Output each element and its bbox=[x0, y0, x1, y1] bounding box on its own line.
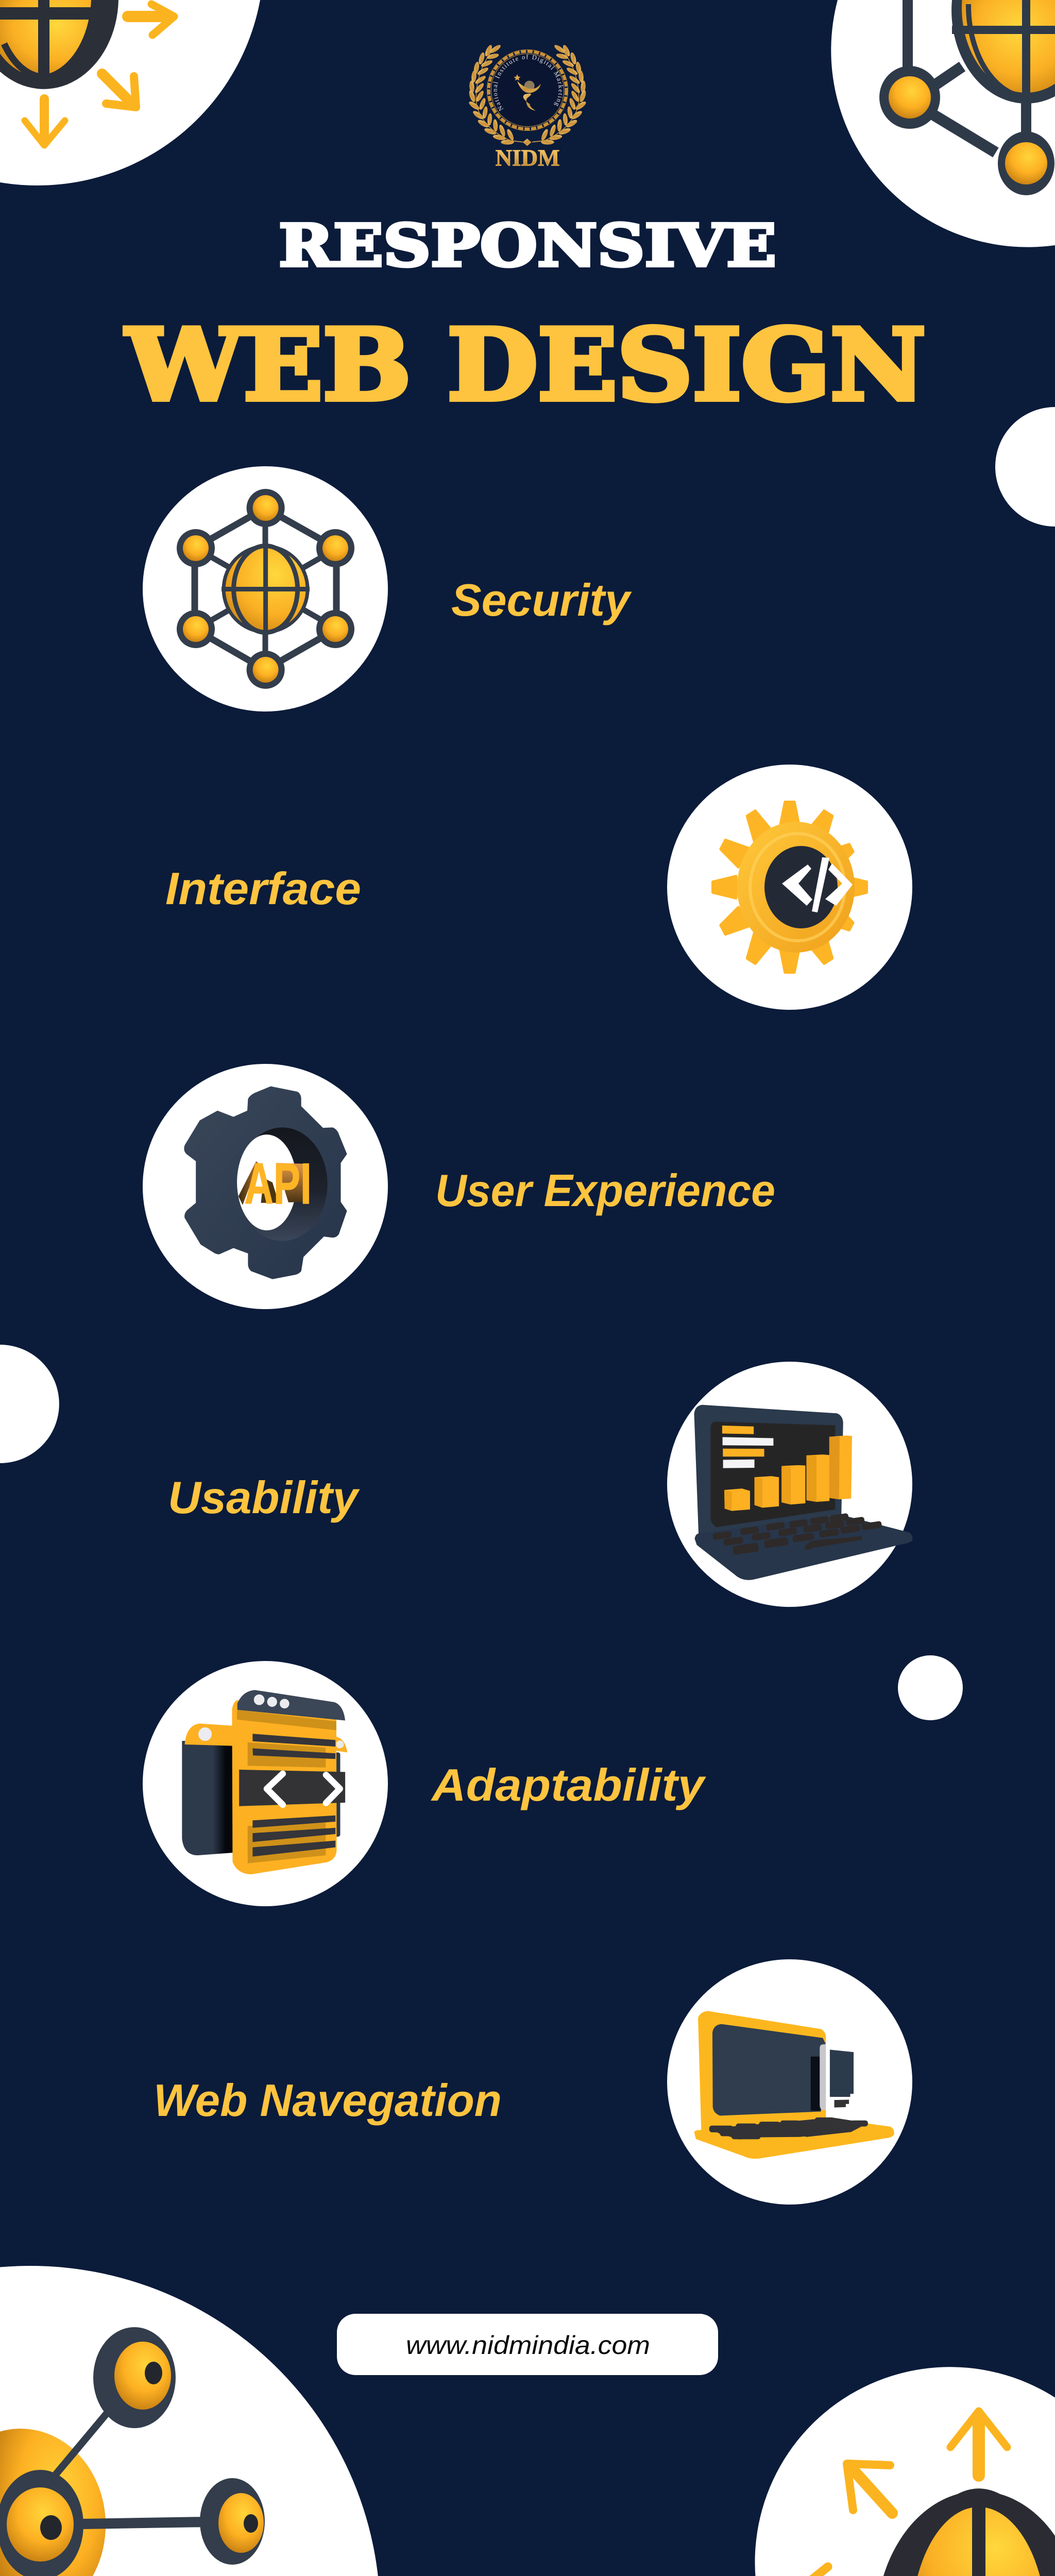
list bars bbox=[722, 1426, 773, 1468]
label: User Experience bbox=[435, 1165, 775, 1216]
decorative circle: top left with globe and arrows bbox=[0, 0, 260, 185]
title: RESPONSIVE: RESPONSIVE bbox=[279, 212, 776, 280]
icon: top node bbox=[93, 2327, 176, 2428]
decorative circle: left bbox=[0, 1345, 59, 1463]
icon disc bbox=[667, 1362, 912, 1607]
panel: adaptability bbox=[143, 1661, 706, 1906]
icon: main node bbox=[0, 2470, 83, 2576]
laptop lid bbox=[694, 1405, 843, 1534]
phone shadow bbox=[811, 2057, 821, 2111]
panel: web navigation bbox=[154, 1959, 912, 2205]
decorative circle: bottom right with globe and arrows bbox=[755, 2367, 1055, 2576]
front panel bbox=[232, 1700, 337, 1874]
icon: cropped globe bbox=[0, 0, 118, 89]
window header bbox=[237, 1690, 345, 1720]
label: Adaptability bbox=[431, 1759, 706, 1810]
keyboard bbox=[712, 1513, 882, 1555]
gear hole bbox=[237, 1134, 297, 1230]
gear body bbox=[184, 1087, 347, 1279]
icon disc bbox=[143, 466, 388, 711]
icon: network lines bbox=[903, 0, 1031, 152]
icon: right node bbox=[200, 2478, 265, 2565]
gear inner wall bbox=[237, 1127, 328, 1241]
icon: network node left bbox=[879, 66, 940, 129]
icon: down arrow bbox=[25, 99, 65, 145]
icon: diagonal arrow bbox=[847, 2464, 892, 2513]
laurel right bbox=[532, 44, 587, 145]
website pill bbox=[337, 2314, 718, 2375]
decorative circle: bottom left with network nodes bbox=[0, 2266, 380, 2576]
icon: cropped globe bbox=[875, 2488, 1055, 2576]
icon: yellow sphere bbox=[0, 2429, 106, 2576]
icon: cropped globe bbox=[951, 0, 1055, 104]
laptop base bbox=[694, 2118, 894, 2159]
gear hub bbox=[764, 846, 838, 928]
window buttons bbox=[254, 1694, 290, 1708]
gear ring bbox=[737, 822, 855, 953]
laptop base bbox=[695, 1515, 912, 1580]
logo: NIDM emblem bbox=[469, 45, 586, 171]
panel: user experience bbox=[143, 1064, 775, 1309]
logo wordmark: NIDM bbox=[496, 145, 560, 171]
label: Web Navegation bbox=[154, 2075, 502, 2126]
title: WEB DESIGN: WEB DESIGN bbox=[125, 308, 926, 422]
laptop screen bbox=[712, 2024, 825, 2115]
icon: code gear bbox=[713, 802, 866, 972]
icon: network node bottom bbox=[998, 131, 1054, 195]
network nodes bbox=[177, 489, 354, 689]
decorative circle: small right bbox=[898, 1655, 963, 1720]
decorative circle: right bbox=[995, 407, 1055, 527]
label: Usability bbox=[168, 1472, 360, 1523]
icon: laptop with chart bbox=[694, 1405, 912, 1580]
label: Security bbox=[451, 574, 632, 625]
API letters: API bbox=[245, 1151, 312, 1216]
back window left bbox=[182, 1723, 233, 1855]
panel: security bbox=[143, 466, 632, 711]
navigation band bbox=[239, 1770, 345, 1806]
bar chart bbox=[724, 1435, 852, 1511]
panel: interface bbox=[165, 765, 912, 1010]
chevrons bbox=[267, 1774, 340, 1805]
website url: www.nidmindia.com bbox=[406, 2331, 650, 2360]
icon: API gear bbox=[184, 1087, 347, 1279]
keyboard bbox=[709, 2117, 868, 2140]
inner wreath ring bbox=[487, 49, 568, 131]
circular institute name: National Institute of Digital Marketing bbox=[493, 54, 564, 111]
code symbol bbox=[782, 857, 853, 912]
decorative circle: top right with network globe bbox=[831, 0, 1055, 247]
phone bbox=[820, 2044, 857, 2111]
panel: usability bbox=[168, 1362, 912, 1607]
gear teeth bbox=[713, 802, 866, 972]
emblem symbol bbox=[514, 74, 541, 111]
central globe bbox=[222, 545, 310, 634]
icon: diagonal arrow bbox=[102, 74, 136, 107]
laptop lid bbox=[698, 2011, 826, 2130]
label: Interface bbox=[165, 863, 361, 914]
icon disc bbox=[143, 1661, 388, 1906]
laptop screen bbox=[711, 1421, 835, 1527]
icon disc bbox=[143, 1064, 388, 1309]
text lines bbox=[252, 1734, 335, 1857]
hexagon connectors bbox=[195, 508, 337, 670]
content shadows bbox=[237, 1710, 336, 1863]
icon: up arrow bbox=[950, 2411, 1007, 2476]
API letters bbox=[239, 1151, 312, 1216]
icon disc bbox=[667, 765, 912, 1010]
icon: right arrow bbox=[128, 4, 174, 35]
icon: laptop and phone bbox=[694, 2011, 894, 2159]
back window right bbox=[334, 1736, 347, 1837]
laurel diamond bbox=[523, 139, 532, 146]
icon: left arrow bbox=[793, 2567, 862, 2576]
icon disc bbox=[667, 1959, 912, 2205]
icon: connector lines bbox=[50, 2409, 206, 2576]
icon: network globe bbox=[177, 489, 354, 689]
icon: responsive windows bbox=[182, 1690, 347, 1874]
laurel left bbox=[468, 44, 523, 145]
